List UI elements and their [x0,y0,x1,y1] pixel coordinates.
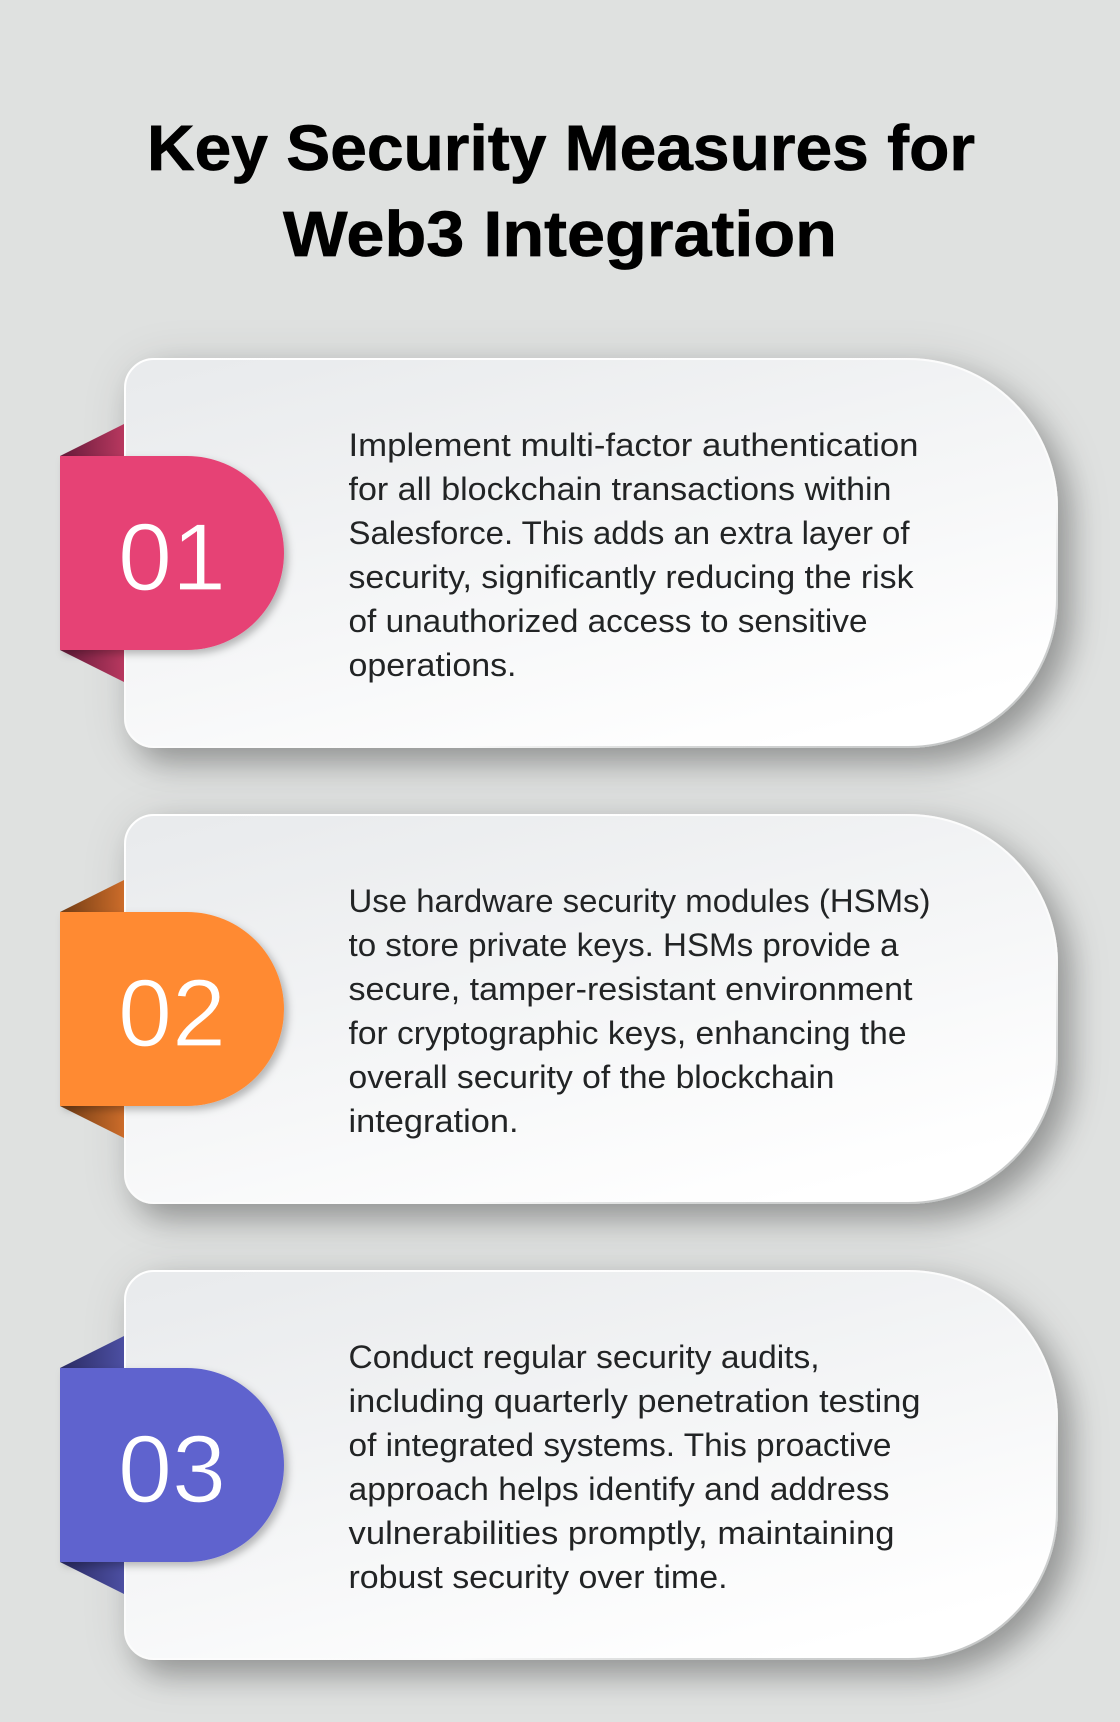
ribbon folds 01 [60,424,124,682]
text block 01: Salesforce. This adds an extra layer of [348,515,910,551]
panel: step 01 [60,359,1057,747]
text block 03: Conduct regular security audits, [348,1339,820,1375]
panel: step 03 [60,1271,1057,1659]
card 01 [125,359,1057,747]
number badge 02 [60,912,284,1106]
number badge 01: 01 [118,504,226,611]
text block 02 [348,883,930,1139]
text block 03: vulnerabilities promptly, maintaining [348,1515,894,1551]
title: Key Security Measures for [147,112,975,184]
text block 03: including quarterly penetration testing [348,1383,920,1419]
card 02 [125,815,1057,1203]
ribbon folds 03 [60,1336,124,1594]
text block 02: Use hardware security modules (HSMs) [348,883,930,919]
text block 01: for all blockchain transactions within [348,471,892,507]
card 03 [125,1271,1057,1659]
number badge 02: 02 [118,960,226,1067]
text block 02: for cryptographic keys, enhancing the [348,1015,906,1051]
title [147,112,975,270]
text block 01: of unauthorized access to sensitive [348,603,868,639]
text block 02: secure, tamper-resistant environment [348,971,912,1007]
text block 02: integration. [348,1103,518,1139]
text block 01: security, significantly reducing the risk [348,559,914,595]
number badge 03: 03 [118,1416,226,1523]
number badge 01 [60,456,284,650]
text block 03 [348,1339,920,1595]
panel: step 02 [60,815,1057,1203]
text block 02: overall security of the blockchain [348,1059,834,1095]
text block 01 [348,427,918,683]
text block 03: approach helps identify and address [348,1471,890,1507]
text block 02: to store private keys. HSMs provide a [348,927,899,963]
text block 01: operations. [348,647,516,683]
text block 03: robust security over time. [348,1559,728,1595]
text block 03: of integrated systems. This proactive [348,1427,892,1463]
text block 01: Implement multi-factor authentication [348,427,918,463]
number badge 03 [60,1368,284,1562]
title: Web3 Integration [283,198,837,270]
ribbon folds 02 [60,880,124,1138]
